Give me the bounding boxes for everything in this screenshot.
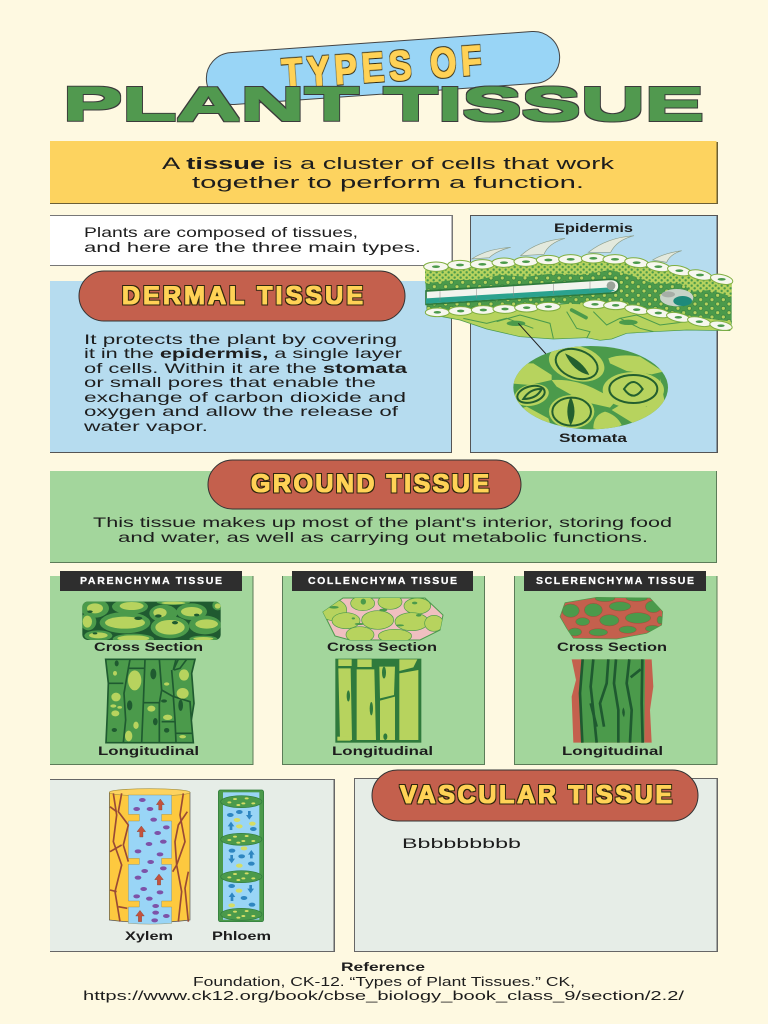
panel: dermal tissue: oxygen and allow the release of bbox=[84, 403, 398, 419]
label: phloem: Phloem bbox=[212, 931, 271, 943]
vascular description: Bbbbbbbbb bbox=[402, 835, 521, 851]
panel: dermal tissue: or small pores that enable the bbox=[84, 374, 376, 390]
panel: vascular tissue bbox=[354, 770, 718, 952]
collenchyma longitudinal label: Longitudinal bbox=[332, 746, 433, 758]
reference: Foundation, CK-12. “Types of Plant Tissues.” CK, bbox=[193, 975, 575, 989]
panel: dermal tissue: exchange of carbon dioxide and bbox=[84, 389, 406, 405]
pointer line bbox=[518, 323, 546, 354]
label: epidermis: Epidermis bbox=[554, 223, 633, 235]
title bbox=[63, 30, 704, 130]
reference: Reference bbox=[341, 960, 425, 974]
panel: intro: and here are the three main types. bbox=[84, 239, 421, 255]
lower epidermis bbox=[425, 300, 733, 332]
reference bbox=[83, 960, 685, 1003]
panel: sclerenchyma bbox=[514, 571, 718, 765]
sclerenchyma cross section label: Cross Section bbox=[557, 642, 667, 654]
panel: ground tissue: and water, as well as carrying out metabolic functions. bbox=[118, 529, 648, 545]
panel: dermal tissue: of cells. Within it are the stomata bbox=[84, 360, 407, 376]
parenchyma label: PARENCHYMA TISSUE bbox=[80, 575, 222, 587]
ground heading pill bbox=[208, 460, 521, 509]
panel: dermal tissue: it in the epidermis, a single layer bbox=[84, 345, 403, 361]
mesophyll bbox=[425, 258, 732, 322]
title pill bbox=[205, 30, 561, 106]
panel: definition bbox=[50, 141, 718, 204]
dermal heading pill: DERMAL TISSUE bbox=[122, 282, 363, 310]
vascular heading pill bbox=[372, 770, 698, 821]
vein bundle cross section bbox=[660, 289, 693, 306]
label: stomata: Stomata bbox=[559, 433, 628, 445]
sclerenchyma longitudinal bbox=[572, 659, 653, 743]
icon: phloem bbox=[218, 790, 264, 922]
ground heading pill: GROUND TISSUE bbox=[251, 470, 489, 498]
vascular heading pill: VASCULAR TISSUE bbox=[400, 781, 672, 809]
panel: epidermis illustration background bbox=[470, 215, 718, 453]
collenchyma label: COLLENCHYMA TISSUE bbox=[308, 575, 457, 587]
intro text: Plants are composed of tissues, bbox=[84, 224, 358, 240]
icon: leaf cross section bbox=[424, 236, 734, 432]
panel: definition: together to perform a function. bbox=[192, 174, 584, 192]
panel: collenchyma bbox=[282, 571, 485, 765]
panel: intro bbox=[50, 215, 453, 266]
sclerenchyma label: SCLERENCHYMA TISSUE bbox=[536, 575, 694, 587]
sclerenchyma label bbox=[524, 571, 706, 591]
collenchyma cross section label: Cross Section bbox=[327, 642, 437, 654]
reference: https://www.ck12.org/book/cbse_biology_book_class_9/section/2.2/ bbox=[83, 989, 685, 1003]
lower pale cell layer bbox=[433, 302, 732, 340]
stomata magnified bbox=[513, 346, 668, 430]
parenchyma label bbox=[60, 571, 242, 591]
sclerenchyma longitudinal label: Longitudinal bbox=[562, 746, 663, 758]
title line: types of: TYPES OF bbox=[280, 38, 483, 98]
panel: ground tissue bbox=[50, 460, 717, 563]
panel: dermal tissue: water vapor. bbox=[82, 418, 208, 434]
panel: parenchyma bbox=[50, 571, 254, 765]
title line: plant tissue: PLANT TISSUE bbox=[63, 78, 704, 130]
panel: dermal tissue bbox=[50, 271, 452, 453]
icon: xylem bbox=[109, 789, 190, 924]
collenchyma cross section bbox=[322, 598, 444, 640]
upper epidermis bbox=[424, 254, 734, 286]
collenchyma label bbox=[292, 571, 473, 591]
collenchyma longitudinal bbox=[335, 659, 421, 743]
parenchyma cross section bbox=[82, 602, 221, 640]
label: xylem: Xylem bbox=[125, 931, 173, 943]
vascular vein bbox=[426, 279, 619, 304]
panel: xylem and phloem bbox=[50, 779, 335, 952]
sclerenchyma cross section bbox=[560, 595, 663, 639]
definition text: A tissue is a cluster of cells that work bbox=[162, 155, 615, 173]
trichomes bbox=[472, 236, 682, 262]
parenchyma longitudinal label: Longitudinal bbox=[98, 746, 199, 758]
palisade layer bbox=[425, 258, 732, 297]
parenchyma longitudinal bbox=[106, 659, 195, 743]
dermal heading pill bbox=[79, 271, 405, 321]
dermal description: It protects the plant by covering bbox=[84, 331, 397, 347]
ground description: This tissue makes up most of the plant's interior, storing food bbox=[93, 514, 672, 530]
parenchyma cross section label: Cross Section bbox=[94, 642, 203, 654]
